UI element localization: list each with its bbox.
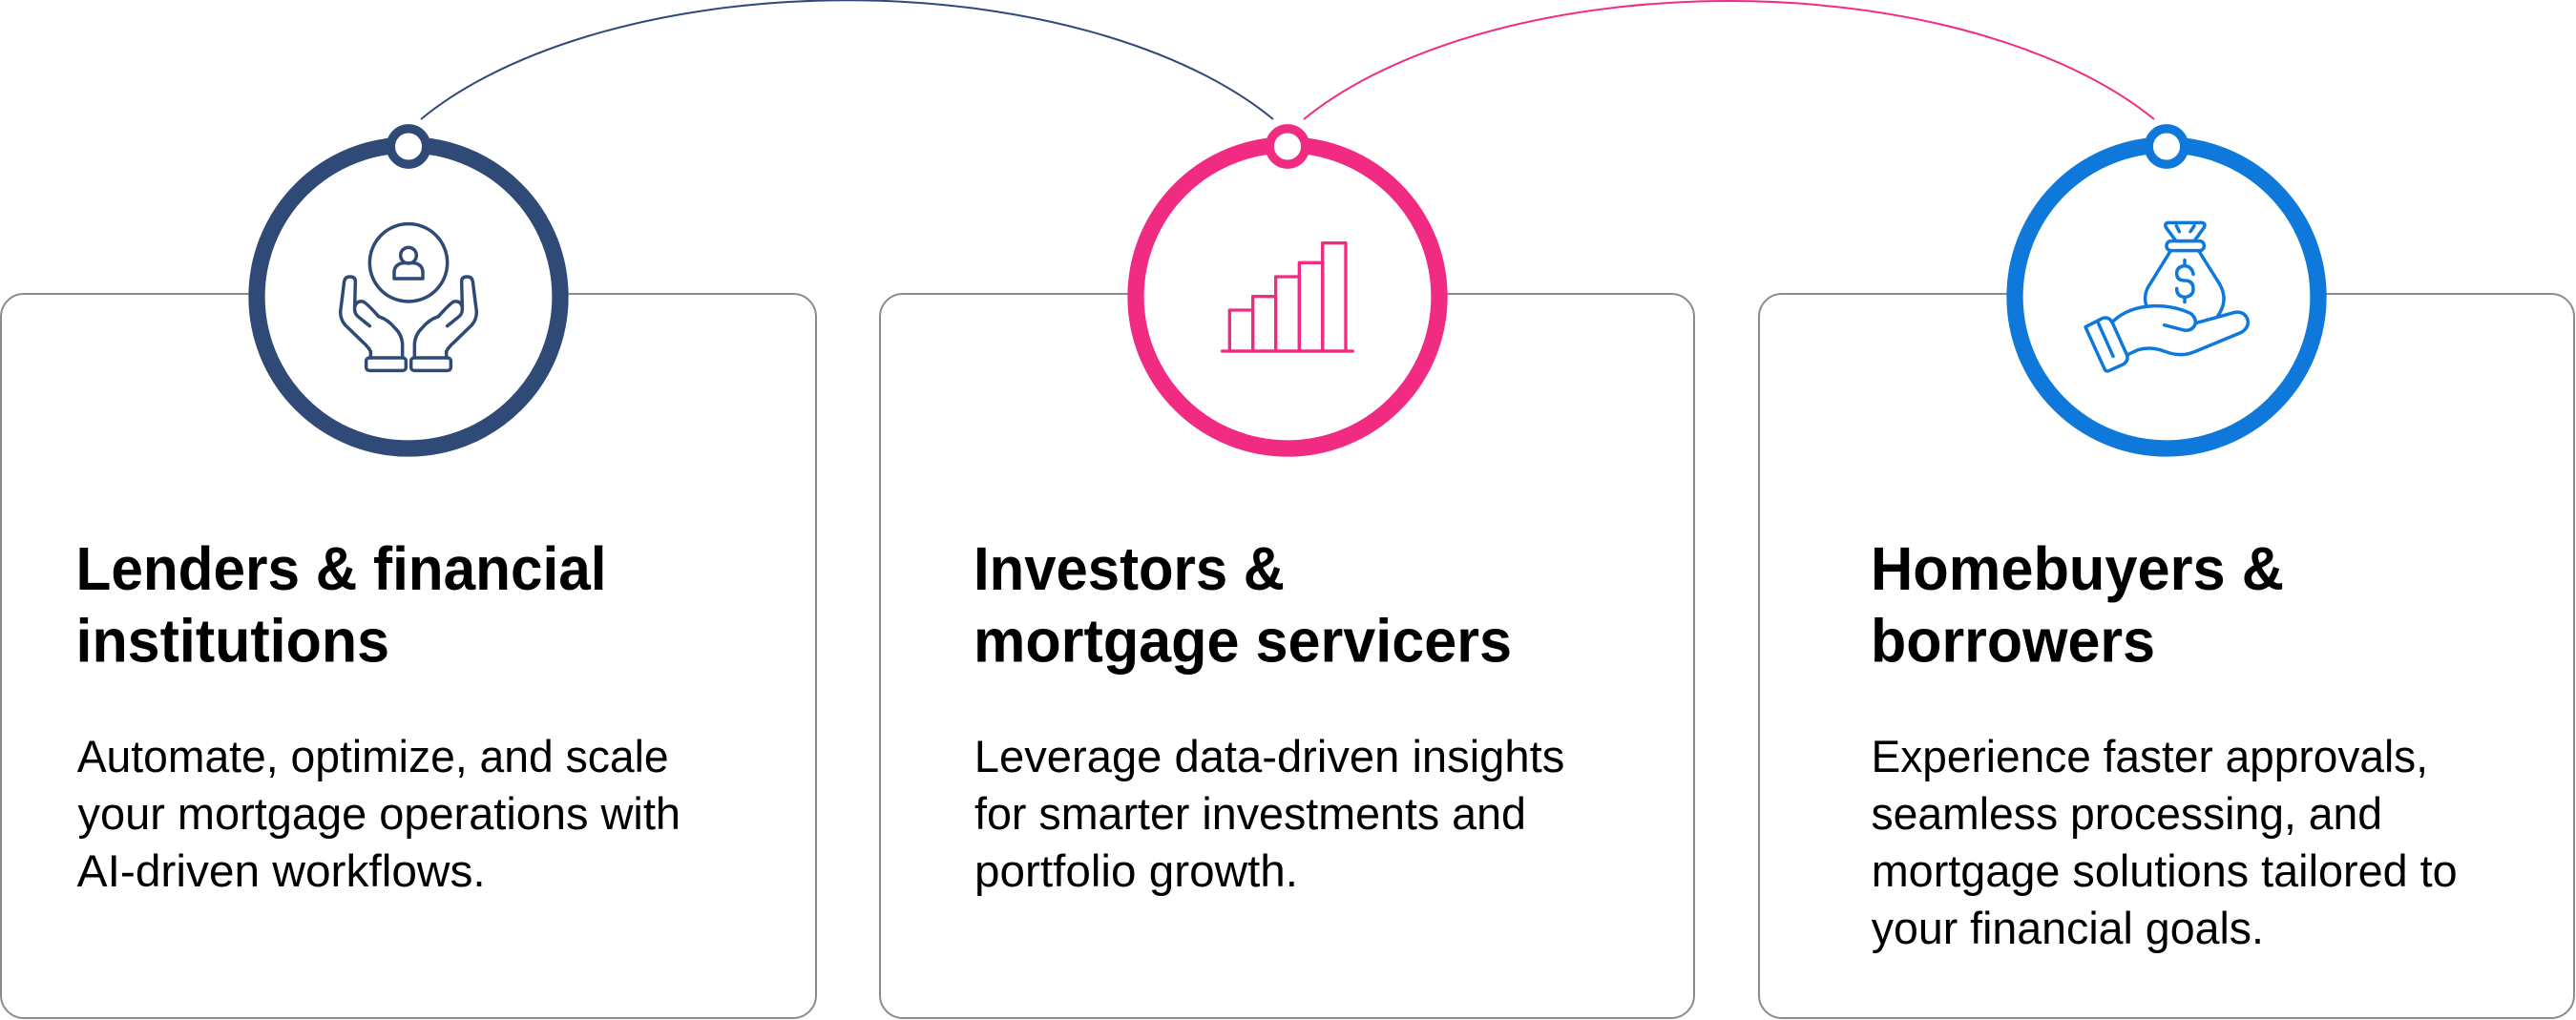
icon: rising bar chart [1223,243,1352,351]
circle badge: blue [2015,129,2318,448]
heading: institutions [76,607,389,676]
heading: borrowers [1871,607,2155,676]
body text: Leverage data-driven insights [974,731,1564,781]
heading: Homebuyers & [1871,534,2284,603]
body text: portfolio growth. [974,845,1298,896]
body text: your mortgage operations with [78,788,681,839]
body text: seamless processing, and [1871,788,2382,839]
heading [974,534,1512,676]
body text: for smarter investments and [974,788,1526,839]
body text: Automate, optimize, and scale [77,731,669,781]
card outline [1,294,816,1018]
connector arc: navy [421,0,1273,119]
body text [1871,731,2458,953]
card outline [880,294,1694,1018]
connector arc: pink [1304,1,2154,119]
body text [77,731,681,896]
icon: hands holding person [341,224,476,370]
heading [1871,534,2284,676]
panel: investors and mortgage servicers [880,129,1694,1018]
heading: Lenders & financial [76,534,607,603]
body text: your financial goals. [1872,903,2264,953]
panel: lenders and financial institutions [1,129,816,1018]
body text [974,731,1564,896]
heading: mortgage servicers [974,607,1512,676]
circle badge: pink [1136,129,1439,448]
card outline [1759,294,2574,1018]
panel: homebuyers and borrowers [1759,129,2574,1018]
heading [76,534,607,676]
heading: Investors & [974,534,1285,603]
body text: AI-driven workflows. [77,845,486,896]
icon: hand holding money bag [2085,222,2248,371]
body text: Experience faster approvals, [1871,731,2428,781]
circle badge: navy [257,129,560,448]
body text: mortgage solutions tailored to [1872,845,2458,896]
